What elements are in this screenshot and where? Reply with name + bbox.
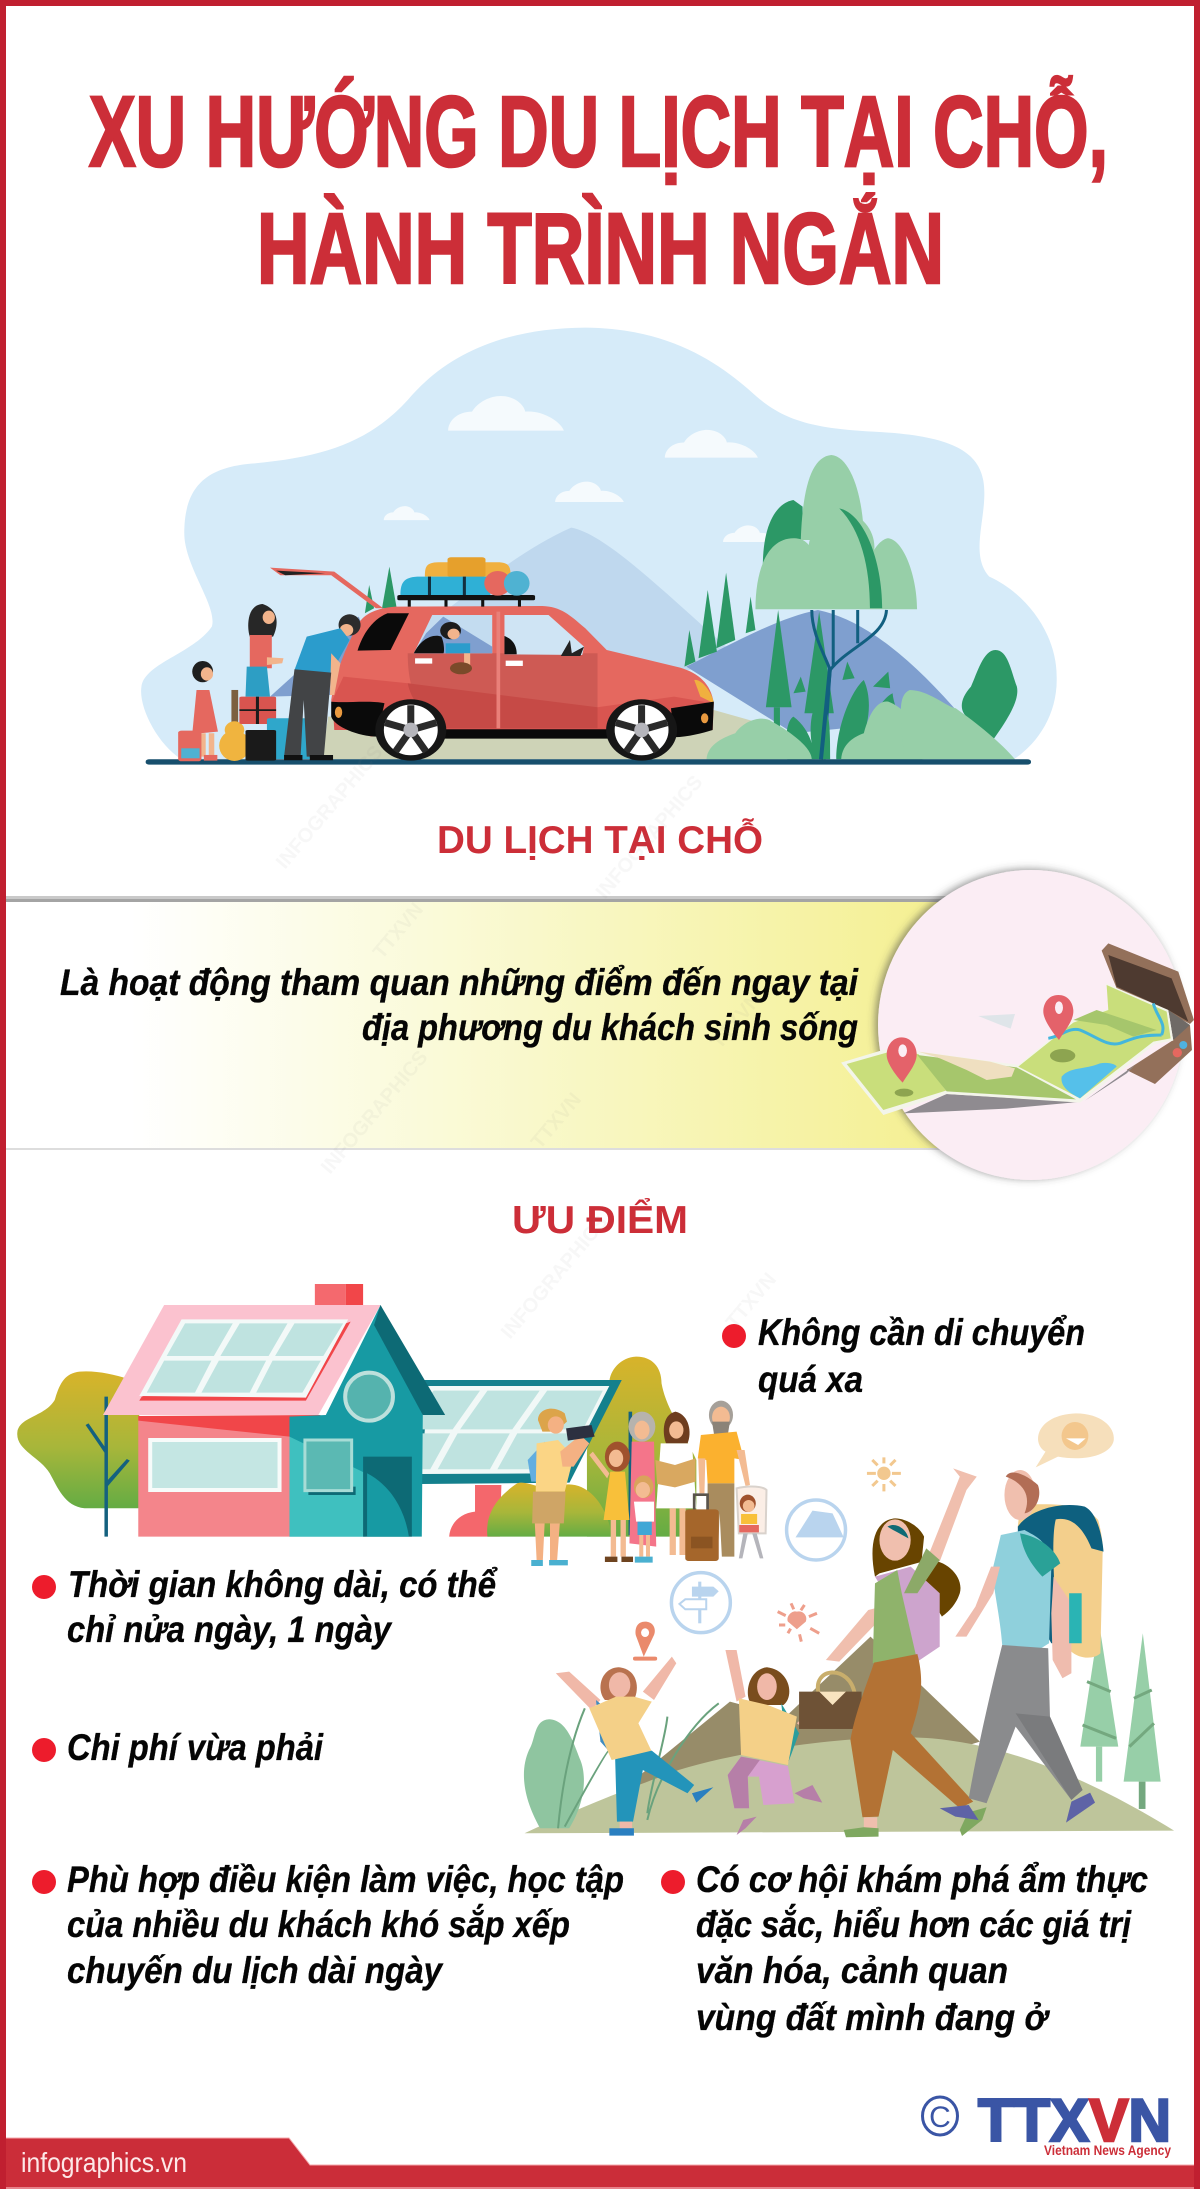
bullet: thoi gian: Thời gian không dài, có thể [68, 1564, 498, 1605]
tent icon [787, 1500, 846, 1560]
bullet list [32, 1312, 1148, 2038]
watermarks: INFOGRAPHICS [272, 742, 387, 873]
watermarks: INFOGRAPHICS [592, 772, 707, 903]
bullet: co co hoi: văn hóa, cảnh quan [696, 1950, 1008, 1991]
mother with map [655, 1412, 696, 1555]
heading: du lich tai cho: DU LỊCH TẠI CHỖ [437, 817, 763, 862]
house [103, 1284, 445, 1537]
ground line [146, 759, 1031, 765]
watermarks: TTXVN [369, 899, 428, 963]
bullet: co co hoi [661, 1859, 1148, 2038]
pin holes [898, 1001, 1063, 1057]
logo: copyright and TTXVN: Vietnam News Agency [1044, 2142, 1171, 2158]
watermarks: TTXVN [722, 1269, 781, 1333]
dark shrub [962, 650, 1017, 745]
title: HÀNH TRÌNH NGẮN [257, 192, 944, 305]
logo: copyright and TTXVN: C [929, 2101, 951, 2134]
heading: uu diem: ƯU ĐIỂM [512, 1197, 688, 1242]
watermarks: INFOGRAPHICS [317, 1047, 432, 1178]
signpost icon [671, 1573, 730, 1633]
man hiker [940, 1470, 1104, 1823]
woman [246, 604, 283, 697]
bullet: phu hop: Phù hợp điều kiện làm việc, học tập [67, 1859, 624, 1900]
foreground bushes [706, 662, 1015, 759]
bullet: khong can di chuyen: quá xa [758, 1359, 863, 1400]
bullet: phu hop: chuyến du lịch dài ngày [67, 1950, 444, 1991]
watermarks [272, 742, 781, 1343]
pink circle [878, 870, 1184, 1180]
man [284, 614, 361, 760]
blue mountains [270, 610, 962, 733]
footer bar [0, 2138, 1200, 2189]
picnic basket [799, 1672, 862, 1729]
pine trees [365, 567, 834, 727]
illustration: solar house [17, 1284, 696, 1537]
woman hiker [826, 1468, 987, 1837]
girl in yellow dress [589, 1442, 633, 1562]
photographer [528, 1409, 595, 1566]
title [89, 76, 1108, 305]
yellow tree right [587, 1357, 696, 1537]
boy [634, 1475, 654, 1563]
big tree [755, 455, 917, 759]
bullet: phu hop: của nhiều du khách khó sắp xếp [67, 1903, 570, 1945]
speech bubble [1036, 1413, 1114, 1467]
tree blob left [17, 1371, 139, 1508]
heart sun icon [778, 1603, 819, 1642]
girl, backpack and guitar [178, 661, 311, 761]
roof rack and luggage [397, 557, 535, 607]
definition text: Là hoạt động tham quan những điểm đến ngay tại [60, 962, 859, 1003]
large solar panel [422, 1380, 622, 1484]
mountain [612, 1637, 980, 1798]
stroller and baby [737, 1487, 767, 1558]
car [270, 568, 714, 761]
definition text [60, 962, 859, 1048]
map pin icon [633, 1622, 657, 1661]
footer source text: infographics.vn [21, 2147, 187, 2178]
child two [725, 1650, 826, 1835]
definition text: địa phương du khách sinh sống [362, 1007, 858, 1048]
brown suitcase [685, 1493, 719, 1561]
location pins [887, 995, 1073, 1083]
bullet: co co hoi: Có cơ hội khám phá ẩm thực [696, 1859, 1148, 1900]
bullet: co co hoi: đặc sắc, hiểu hơn các giá trị [696, 1903, 1132, 1945]
clouds [384, 396, 778, 542]
grandfather [698, 1401, 750, 1557]
panel: definition band [6, 896, 966, 1150]
watermarks: INFOGRAPHICS [497, 1212, 612, 1343]
bullet: thoi gian: chỉ nửa ngày, 1 ngày [67, 1609, 393, 1650]
bullet: khong can di chuyen [722, 1312, 1085, 1400]
illustration: map and suitcase [841, 943, 1194, 1115]
watermarks: TTXVN [707, 989, 766, 1053]
grandmother [629, 1412, 656, 1547]
bullet: chi phi: Chi phí vừa phải [67, 1727, 324, 1768]
roof solar panel [139, 1319, 351, 1401]
illustration: family of tourists [528, 1401, 767, 1566]
illustration: family car trip [141, 328, 1057, 765]
folded map [841, 983, 1173, 1115]
bullet: khong can di chuyen: Không cần di chuyển [758, 1312, 1085, 1353]
pale mountain [389, 528, 726, 700]
bullet: thoi gian [32, 1564, 498, 1650]
watermarks: TTXVN [527, 1089, 586, 1153]
child one [556, 1657, 713, 1836]
sky blob [141, 328, 1057, 759]
sun icon [867, 1457, 901, 1491]
logo: copyright and TTXVN: TTXVN [978, 2087, 1171, 2154]
suitcase [1102, 943, 1194, 1084]
road [322, 710, 815, 759]
ground hill [525, 1737, 1174, 1833]
illustration: hikers in the mountains [524, 1413, 1174, 1837]
map shadow [903, 1065, 1135, 1113]
panel stand [449, 1485, 501, 1537]
teddy and child in car [440, 622, 472, 674]
paper plane [978, 1014, 1015, 1029]
bush [487, 1483, 612, 1537]
front wheel and rear wheel [375, 699, 677, 761]
bullet: co co hoi: vùng đất mình đang ở [696, 1997, 1051, 2038]
tree stem [86, 1397, 130, 1537]
bullet: phu hop [32, 1859, 624, 1991]
pine trees right [1080, 1623, 1161, 1809]
plant left [524, 1703, 719, 1828]
